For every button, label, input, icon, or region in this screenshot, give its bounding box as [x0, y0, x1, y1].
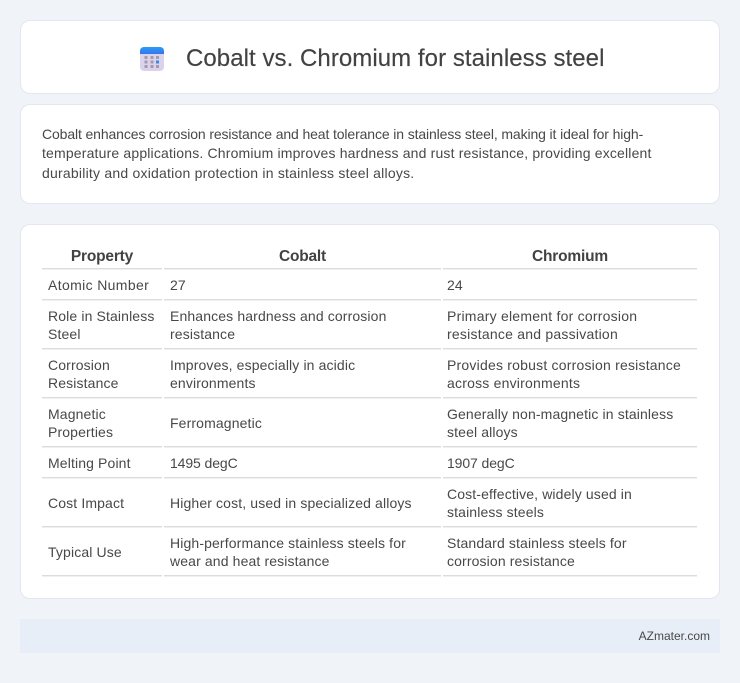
row: magnetic properties: Properties — [48, 424, 113, 440]
row: magnetic properties: Ferromagnetic — [170, 415, 262, 431]
row: atomic number: 24 — [447, 277, 463, 293]
row: atomic number — [48, 277, 463, 293]
row: melting point: 1907 degC — [447, 455, 515, 471]
row: corrosion resistance: across environments — [447, 375, 580, 391]
summary text — [42, 126, 652, 181]
row: typical use: Standard stainless steels for — [447, 535, 627, 551]
row: typical use: wear and heat resistance — [170, 553, 330, 569]
table header row — [71, 248, 608, 265]
row: corrosion resistance: Resistance — [48, 375, 119, 391]
row: corrosion resistance: environments — [170, 375, 256, 391]
row: role in stainless steel: Steel — [48, 326, 81, 342]
row: cost impact: Cost Impact — [48, 495, 124, 511]
row: melting point — [48, 455, 515, 471]
row: cost impact — [48, 486, 632, 520]
icon: calendar grid — [140, 47, 164, 71]
comparison table — [42, 248, 697, 577]
table header row: Cobalt — [279, 248, 326, 265]
table header row: Chromium — [532, 248, 608, 265]
panel: title card — [20, 20, 720, 94]
row: corrosion resistance: Corrosion — [48, 357, 110, 373]
row: typical use: corrosion resistance — [447, 553, 575, 569]
summary text: temperature applications. Chromium improves hardness and rust resistance, providing excellent — [42, 145, 652, 161]
row: cost impact: Higher cost, used in specialized alloys — [170, 495, 412, 511]
row: role in stainless steel: Role in Stainless — [48, 308, 154, 324]
row: cost impact: stainless steels — [447, 504, 544, 520]
row: corrosion resistance: Improves, especially in acidic — [170, 357, 355, 373]
row: typical use: High-performance stainless steels for — [170, 535, 406, 551]
row: magnetic properties — [48, 406, 673, 440]
table header row: Property — [71, 248, 133, 265]
footer bar — [20, 619, 720, 653]
panel: summary card — [20, 104, 720, 204]
row: typical use — [48, 535, 627, 569]
row: magnetic properties: steel alloys — [447, 424, 518, 440]
row: atomic number: 27 — [170, 277, 186, 293]
title: Cobalt vs. Chromium for stainless steel — [186, 45, 604, 72]
row: melting point: Melting Point — [48, 455, 131, 471]
panel: comparison table card — [20, 224, 720, 599]
row: atomic number: Atomic Number — [48, 277, 149, 293]
row: corrosion resistance: Provides robust corrosion resistance — [447, 357, 681, 373]
row: role in stainless steel: Enhances hardness and corrosion — [170, 308, 386, 324]
summary text: durability and oxidation protection in stainless steel alloys. — [42, 165, 414, 181]
row: magnetic properties: Magnetic — [48, 406, 106, 422]
summary text: Cobalt enhances corrosion resistance and heat tolerance in stainless steel, making it ideal for high- — [42, 126, 643, 142]
row: cost impact: Cost-effective, widely used in — [447, 486, 632, 502]
row: role in stainless steel: resistance — [170, 326, 235, 342]
row: corrosion resistance — [48, 357, 681, 391]
footer source text: AZmater.com — [639, 629, 710, 643]
row: typical use: Typical Use — [48, 544, 122, 560]
row: melting point: 1495 degC — [170, 455, 238, 471]
row: role in stainless steel: resistance and passivation — [447, 326, 618, 342]
row: role in stainless steel: Primary element for corrosion — [447, 308, 637, 324]
row: role in stainless steel — [48, 308, 637, 342]
row: magnetic properties: Generally non-magnetic in stainless — [447, 406, 673, 422]
